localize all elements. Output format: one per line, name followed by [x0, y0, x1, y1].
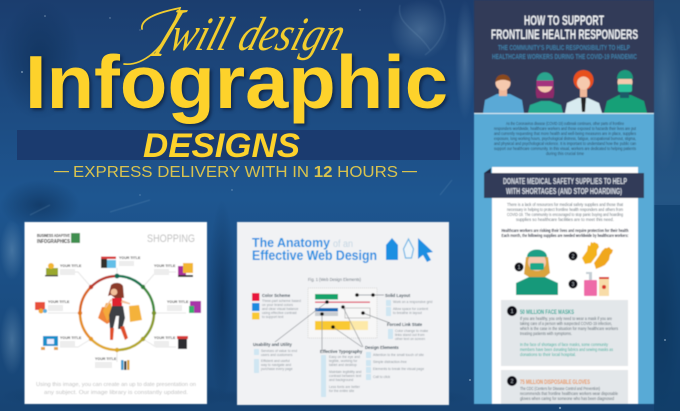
block: usability and utility: Usability and Utility [253, 342, 293, 347]
block: usability and utility: way to navigate and [261, 363, 291, 367]
panel heading: business adaptive infographics [37, 233, 80, 245]
tagline: express delivery: EXPRESS DELIVERY WITH IN 12 HOURS [73, 164, 398, 181]
block: effective typography: and background [329, 378, 353, 382]
block: color scheme: on your brand colors [262, 303, 293, 307]
panel subheading [492, 45, 637, 61]
card: face masks: members have been donating fabrics and sewing masks as [520, 347, 614, 352]
block: color scheme [252, 293, 301, 320]
card: face masks: taking care of a person with suspected COVID-19 infection, [520, 321, 612, 326]
woman with shopping bags [98, 283, 142, 340]
block: color scheme: and clear visual balance [262, 307, 298, 311]
block: design elements: Call to click [373, 375, 390, 379]
item: top [101, 256, 141, 268]
block: color scheme: Color Scheme [262, 293, 291, 298]
block: usability and utility: Services of value to end [261, 349, 297, 353]
text block: donation: supplies so healthcare facilities are to meet this need. [516, 217, 614, 222]
block: color scheme: Three-part scheme based [262, 299, 301, 303]
numbered markers: 1 [518, 265, 521, 271]
card: disposable gloves: The CDC (Centers for Disease Control and Prevention) [520, 386, 600, 391]
intro paragraph [494, 121, 637, 156]
card: face masks: In the face of shortages of face masks, some community [520, 342, 609, 347]
card: face masks: which is the case in the situation for many healthcare workers [520, 326, 619, 331]
icon: pen nib [404, 239, 414, 258]
blue body [474, 113, 654, 404]
heading: Infographic: Infographic [25, 40, 448, 124]
card: face masks: 50 MILLION FACE MASKS [520, 309, 574, 316]
block: effective typography [320, 349, 363, 397]
text block: donation: COVID-19. The community is encouraged to stop panic buying and hoarding [507, 212, 623, 217]
block: design elements: Elements to break the visual page [373, 367, 424, 371]
numbered markers: 2 [572, 254, 575, 260]
block: forced link state [387, 322, 428, 341]
item: upper left: YOUR TITLE [60, 264, 82, 268]
item: middle left: YOUR TITLE [48, 300, 70, 304]
item: upper right: YOUR TITLE [154, 264, 176, 268]
block: effective typography: Easy on the eye and [329, 355, 360, 359]
item: lower right: YOUR TITLE [154, 336, 176, 340]
block: design elements: Attention to the small touch of site [373, 353, 424, 357]
item: middle left [35, 300, 70, 314]
block: forced link state: other text on screen [395, 337, 425, 341]
figure: health worker three [565, 70, 602, 113]
wireframe diagram [275, 288, 390, 350]
panel heading [491, 12, 638, 42]
ribbon heading [484, 168, 644, 198]
card: disposable gloves [501, 370, 628, 404]
card: face masks: If you are healthy, you only need to wear a mask if you are [520, 316, 612, 321]
block: effective typography: tablet and desktop [329, 363, 357, 367]
text block: donation: Each month, the following supplies are needed worldwide by healthcare workers: [502, 233, 629, 238]
intro paragraph: during this crucial time [546, 151, 585, 156]
card: disposable gloves: recommends that frontline healthcare workers wear disposable [520, 391, 618, 396]
block: usability and utility: users and customers [261, 353, 293, 357]
block: solid layout: to breathe in layout [393, 311, 422, 315]
block: usability and utility: purchase every page [261, 367, 293, 371]
ring chart [78, 274, 156, 352]
panel heading: shopping: SHOPPING [147, 233, 195, 245]
caption: any subject. Our image library is constantly updated. [44, 390, 188, 396]
caption: Using this image, you can create an up to date presentation on [36, 382, 196, 388]
panel subheading: THE COMMUNITY'S PUBLIC RESPONSIBILITY TO HELP [498, 45, 630, 52]
card: face masks: 1 [511, 309, 514, 315]
card: disposable gloves: gloves when caring for someone who has been diagnosed [520, 396, 614, 401]
block: solid layout [385, 293, 432, 316]
figure: nurse with mask [516, 250, 558, 295]
item: bottom: YOUR TITLE [95, 357, 117, 361]
panel heading: business adaptive infographics: INFOGRAPHICS [37, 239, 70, 245]
block: solid layout: Work on a responsive grid [393, 300, 432, 304]
subheading: DESIGNS: DESIGNS [143, 127, 300, 165]
numbered markers [514, 252, 578, 288]
block: solid layout: Solid Layout [385, 293, 411, 298]
item: lower left: YOUR TITLE [60, 336, 82, 340]
panel heading: of an [333, 239, 353, 250]
intro paragraph: and currently requesting that more health and well-being measures are in place, supplies [494, 131, 636, 136]
block: forced link state: links stand out from [395, 333, 425, 337]
caption [36, 382, 196, 396]
block: forced link state: Color change to make [395, 329, 428, 333]
icon: gloves [582, 242, 613, 269]
item: upper left [45, 263, 82, 276]
block: effective typography: Effective Typography [320, 349, 363, 354]
icon: sanitizer and cream [584, 272, 609, 296]
block: color scheme: to support text [262, 315, 284, 319]
card: face masks: donations to their local hospital. [520, 352, 576, 357]
ribbon heading: WITH SHORTAGES (AND STOP HOARDING) [506, 187, 622, 196]
item: middle right [167, 300, 201, 313]
intro paragraph: and physical and psychological violence. It is important to understand how the public can [494, 141, 637, 146]
text block: donation: There is a lack of resources for medical safety supplies and those that [507, 202, 624, 207]
text block: donation: necessary in helping to protect frontline health responders and others from [507, 207, 623, 212]
item: bottom [95, 357, 130, 370]
item: lower left [41, 336, 82, 350]
block: design elements [365, 345, 424, 380]
panel: anatomy of effective web design [237, 222, 449, 405]
block: design elements: Simple distraction-free [373, 360, 407, 364]
block: usability and utility [253, 342, 297, 373]
intro paragraph: exposure, long working hours, psychological distress, fatigue, occupational burnout, stigma, [494, 136, 636, 141]
block: effective typography: Maintain legibility and [329, 370, 362, 374]
figure caption: Fig. 1 (Web Design Elements) [308, 277, 361, 282]
item: upper right [154, 263, 193, 277]
text block: donation [502, 202, 629, 238]
heading: I will design [124, 0, 353, 72]
figure: health worker two [528, 72, 563, 113]
connector lines [48, 268, 186, 362]
panel heading: Effective Web Design [252, 247, 377, 263]
block: color scheme: using effective contrast [262, 311, 297, 315]
numbered markers: 3 [572, 282, 575, 288]
card: face masks: treating patients with symptoms. [520, 331, 572, 336]
intro paragraph: As the Coronavirus disease (COVID-19) outbreak continues, other parts of frontline [506, 121, 624, 126]
card: disposable gloves: 2 [511, 379, 514, 385]
block: usability and utility: Efficient and useful [261, 359, 290, 363]
band behind subheading [17, 130, 460, 160]
icon: pencil [386, 238, 398, 260]
item: lower right [154, 336, 188, 349]
card: disposable gloves: 75 MILLION DISPOSABLE GLOVES [520, 379, 590, 386]
block: effective typography: contrast between text [329, 374, 361, 378]
item: middle right: YOUR TITLE [167, 300, 189, 304]
icon: cursor [418, 238, 433, 262]
intro paragraph: responders worldwide, healthcare workers and those exposed to hazards their lives are put [494, 126, 637, 131]
block: solid layout: Allow space for content [393, 307, 428, 311]
panel heading: business adaptive infographics: BUSINESS ADAPTIVE [37, 233, 70, 238]
panel: frontline health responders [474, 0, 654, 404]
heading: I will design: will design [164, 7, 353, 61]
white content column [492, 167, 638, 404]
panel heading: HOW TO SUPPORT [524, 12, 604, 28]
panel heading [252, 235, 377, 263]
intro paragraph: support our healthcare community. In this visual, workers are dedicated to helping patients [494, 146, 636, 151]
panel heading: The Anatomy [252, 235, 331, 250]
panel: shopping infographic [24, 222, 207, 404]
block: design elements: Design Elements [365, 345, 399, 350]
block: forced link state: Forced Link State [387, 322, 423, 327]
figure: health worker one [483, 74, 524, 113]
block: effective typography: legible, working for [329, 359, 358, 363]
item: top: YOUR TITLE [119, 256, 141, 260]
text block: donation: Healthcare workers are risking their lives and require protection for their health [502, 228, 629, 233]
figure: health worker four [604, 70, 647, 113]
card: face masks [501, 300, 628, 366]
block: effective typography: for the entire site [329, 389, 354, 393]
block: effective typography: Less fonts are better [329, 385, 361, 389]
